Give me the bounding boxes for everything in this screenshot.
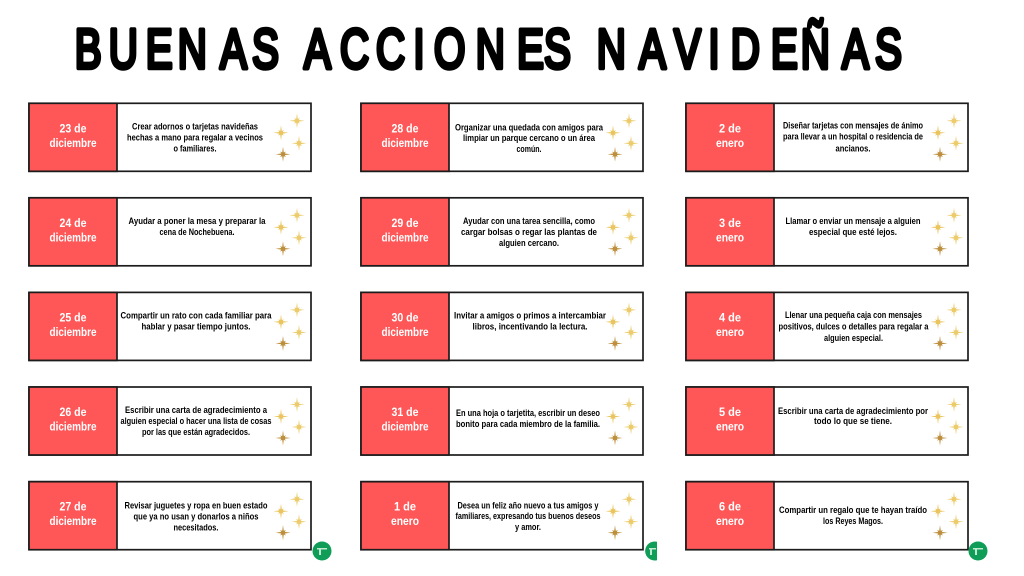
date: 25 de diciembre: 25 de [60, 312, 86, 324]
icon: gold stars [274, 208, 306, 256]
task text [124, 501, 268, 533]
task text: Compartir un rato con cada familiar para [120, 310, 272, 320]
date: 23 de diciembre [29, 103, 117, 171]
task text: hechas a mano para regalar a vecinos [127, 132, 263, 142]
date: 4 de enero: enero [716, 327, 744, 339]
date: 26 de diciembre [29, 387, 117, 455]
date: 4 de enero: 4 de [719, 312, 741, 324]
date: 31 de diciembre: diciembre [382, 422, 428, 434]
task text [127, 121, 263, 153]
task text: especial que esté lejos. [809, 227, 897, 237]
task text [455, 122, 603, 154]
date: 26 de diciembre: 26 de [60, 407, 86, 419]
task text: alguien especial o hacer una lista de cosas [120, 416, 272, 426]
task text: los Reyes Magos. [823, 516, 883, 526]
icon: green badge, third column [968, 542, 988, 560]
task text: común. [516, 144, 542, 154]
date: 4 de enero [686, 292, 774, 360]
task text [778, 310, 929, 343]
task text: necesitados. [174, 523, 218, 533]
task text: Ayudar a poner la mesa y preparar la [128, 216, 266, 226]
task text: alguien especial. [824, 333, 883, 343]
card: 6 de enero [686, 482, 968, 550]
icon: green badge, first column [312, 542, 332, 560]
card: 31 de diciembre [361, 387, 643, 455]
date: 27 de diciembre: 27 de [60, 502, 86, 514]
date: 29 de diciembre [361, 198, 449, 266]
task text: limpiar un parque cercano o un área [463, 133, 595, 143]
icon: gold stars [274, 492, 306, 540]
task text: o familiares. [174, 143, 216, 153]
task text: por las que están agradecidos. [142, 427, 250, 437]
date: 30 de diciembre: 30 de [392, 312, 418, 324]
icon: gold stars [606, 397, 638, 446]
task text: todo lo que se tiene. [814, 416, 892, 426]
icon: green badge, clipped, second column [645, 542, 657, 560]
task text: Crear adornos o tarjetas navideñas [132, 121, 258, 131]
task text: Escribir una carta de agradecimiento por [778, 406, 929, 416]
date: 24 de diciembre [29, 198, 117, 266]
date: 29 de diciembre: diciembre [382, 232, 428, 244]
task text: En una hoja o tarjetita, escribir un deseo [456, 408, 601, 418]
icon: gold stars [274, 302, 306, 351]
date: 24 de diciembre: diciembre [50, 232, 96, 244]
date: 1 de enero: 1 de [394, 502, 416, 514]
task text: Organizar una quedada con amigos para [455, 122, 603, 132]
date: 6 de enero: enero [716, 516, 744, 528]
icon: gold stars [930, 492, 964, 540]
icon: gold stars [606, 492, 638, 540]
task text: Diseñar tarjetas con mensajes de ánimo [783, 120, 924, 130]
card: 23 de diciembre [29, 103, 311, 171]
icon: gold stars [606, 113, 638, 162]
task text: alguien cercano. [499, 238, 559, 248]
task text [120, 405, 272, 437]
icon: gold stars [606, 302, 638, 351]
date: 30 de diciembre [361, 292, 449, 360]
icon: gold stars [274, 113, 306, 162]
task text: cargar bolsas o regar las plantas de [461, 227, 597, 237]
card: 2 de enero [686, 103, 968, 171]
card: 25 de diciembre [29, 292, 311, 360]
task text: que ya no usan y donarlos a niños [134, 512, 259, 522]
title [75, 19, 902, 81]
task text [786, 216, 920, 237]
task text: Invitar a amigos o primos a intercambiar [454, 310, 607, 320]
task text [120, 310, 272, 331]
task text: para llevar a un hospital o residencia de [783, 131, 923, 141]
card: 26 de diciembre [29, 387, 311, 455]
date: 3 de enero: 3 de [719, 218, 741, 230]
date: 24 de diciembre: 24 de [60, 218, 86, 230]
task text [779, 505, 928, 526]
date: 6 de enero [686, 482, 774, 550]
card: 30 de diciembre [361, 292, 643, 360]
card: 24 de diciembre [29, 198, 311, 266]
icon: gold stars [930, 397, 964, 446]
date: 23 de diciembre: 23 de [60, 123, 86, 135]
date: 31 de diciembre: 31 de [392, 407, 418, 419]
card: 1 de enero [361, 482, 643, 550]
task text: cena de Nochebuena. [160, 227, 234, 237]
card: 27 de diciembre [29, 482, 311, 550]
date: 26 de diciembre: diciembre [50, 422, 96, 434]
task text: y amor. [515, 522, 541, 532]
icon: gold stars [606, 208, 638, 256]
icon: gold stars [930, 208, 964, 256]
title: BUENAS [75, 19, 279, 81]
task text [783, 120, 924, 153]
task text: hablar y pasar tiempo juntos. [142, 321, 250, 331]
date: 28 de diciembre: 28 de [392, 123, 418, 135]
icon: gold stars [930, 113, 964, 162]
task text: Revisar juguetes y ropa en buen estado [124, 501, 268, 511]
card: 4 de enero [686, 292, 968, 360]
date: 2 de enero: enero [716, 138, 744, 150]
date: 29 de diciembre: 29 de [392, 218, 418, 230]
date: 2 de enero [686, 103, 774, 171]
task text: Llenar una pequeña caja con mensajes [785, 310, 922, 320]
task text: Escribir una carta de agradecimiento a [125, 405, 267, 415]
task text: libros, incentivando la lectura. [472, 321, 588, 331]
task text: Desea un feliz año nuevo a tus amigos y [458, 501, 599, 511]
date: 25 de diciembre: diciembre [50, 327, 96, 339]
date: 31 de diciembre [361, 387, 449, 455]
date: 5 de enero: enero [716, 422, 744, 434]
card: 5 de enero [686, 387, 968, 455]
date: 3 de enero: enero [716, 232, 744, 244]
task text: familiares, expresando tus buenos deseos [456, 511, 601, 521]
card: 29 de diciembre [361, 198, 643, 266]
date: 28 de diciembre [361, 103, 449, 171]
date: 1 de enero: enero [391, 516, 419, 528]
date: 27 de diciembre [29, 482, 117, 550]
task text: Ayudar con una tarea sencilla, como [463, 216, 596, 226]
date: 25 de diciembre [29, 292, 117, 360]
title: NAVIDEÑAS [597, 19, 902, 81]
task text: positivos, dulces o detalles para regalar a [778, 322, 929, 332]
task text [456, 501, 601, 532]
task text: Compartir un regalo que te hayan traído [779, 505, 928, 515]
task text [128, 216, 266, 237]
date: 3 de enero [686, 198, 774, 266]
date: 2 de enero: 2 de [719, 123, 741, 135]
title: ACCIONES [304, 19, 571, 81]
card: 28 de diciembre [361, 103, 643, 171]
icon: gold stars [274, 397, 306, 446]
date: 23 de diciembre: diciembre [50, 138, 96, 150]
date: 28 de diciembre: diciembre [382, 138, 428, 150]
task text: ancianos. [836, 143, 870, 153]
icon: gold stars [930, 302, 964, 351]
task text [454, 310, 607, 331]
task text: bonito para cada miembro de la familia. [456, 419, 600, 429]
task text [456, 408, 601, 429]
date: 5 de enero: 5 de [719, 407, 741, 419]
date: 1 de enero [361, 482, 449, 550]
task text [461, 216, 597, 248]
card: 3 de enero [686, 198, 968, 266]
task text [778, 406, 929, 426]
date: 30 de diciembre: diciembre [382, 327, 428, 339]
date: 6 de enero: 6 de [719, 502, 741, 514]
date: 5 de enero [686, 387, 774, 455]
task text: Llamar o enviar un mensaje a alguien [786, 216, 920, 226]
date: 27 de diciembre: diciembre [50, 516, 96, 528]
